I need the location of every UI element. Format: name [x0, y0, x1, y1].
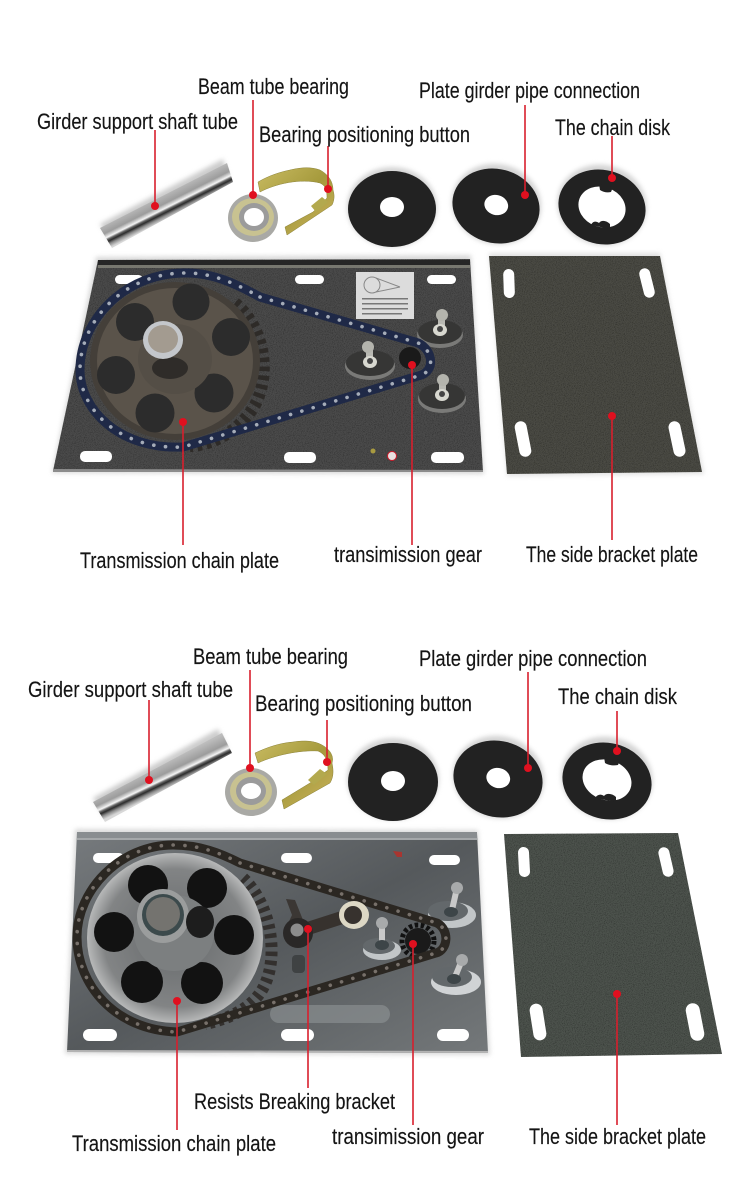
- section 1: side bracket plate: [489, 253, 704, 476]
- label: the chain disk: The chain disk: [555, 115, 671, 140]
- pointer: connection disc: [521, 105, 529, 199]
- pointer: shaft tube: [145, 700, 153, 784]
- bracket slots: [518, 846, 705, 1042]
- pointer: side bracket: [613, 990, 621, 1125]
- labels: section 2: [28, 644, 706, 1156]
- bearing: [228, 194, 278, 242]
- shaft tube: [100, 159, 233, 248]
- bolts on plate: [345, 309, 466, 460]
- label: resists breaking bracket: Resists Breaking bracket: [194, 1089, 395, 1114]
- label: transmission chain plate: Transmission chain plate: [80, 548, 279, 573]
- plate body: [65, 829, 490, 1055]
- mounting slots: [80, 275, 464, 463]
- bearing positioning clip: [258, 168, 334, 235]
- pointer: transmission gear: [408, 361, 416, 545]
- label: the chain disk: The chain disk: [558, 684, 678, 709]
- section 2: main plate: [65, 829, 490, 1055]
- bearing positioning clip: [255, 741, 333, 809]
- instruction label: [356, 272, 414, 319]
- washer disc: [347, 167, 437, 247]
- connection disc: [443, 154, 550, 254]
- braking bracket: [283, 899, 369, 948]
- label: girder support shaft tube: Girder support shaft tube: [37, 109, 238, 134]
- label: plate girder pipe connection: Plate girder pipe connection: [419, 646, 647, 671]
- pointer: chain plate: [179, 418, 187, 545]
- large sprocket: [90, 282, 264, 446]
- large sprocket: [87, 853, 272, 1024]
- pointer: chain plate: [173, 997, 181, 1130]
- washer disc: [347, 738, 439, 821]
- label: bearing positioning button: Bearing positioning button: [255, 691, 472, 716]
- pointer: clip: [324, 146, 332, 193]
- section 2: parts above plate: [93, 726, 662, 830]
- small sprocket: [402, 925, 434, 957]
- label: girder support shaft tube: Girder support shaft tube: [28, 677, 233, 702]
- pointer: clip: [323, 720, 331, 766]
- pointer: connection disc: [524, 672, 532, 772]
- shaft tube: [93, 729, 232, 822]
- pointer: braking bracket: [304, 925, 312, 1088]
- labels: section 1: [37, 74, 698, 573]
- label: bearing positioning button: Bearing positioning button: [259, 122, 470, 147]
- label: side bracket plate: The side bracket plate: [526, 542, 698, 567]
- section 2: side bracket plate: [504, 833, 722, 1057]
- label: beam tube bearing: Beam tube bearing: [198, 74, 349, 99]
- pointer: transmission gear: [409, 940, 417, 1125]
- pointer: side bracket: [608, 412, 616, 540]
- pointer: chain disk: [613, 711, 621, 755]
- label: transmission chain plate: Transmission chain plate: [72, 1131, 276, 1156]
- plate body: [52, 255, 484, 474]
- drive chain: [80, 273, 431, 447]
- label: transmission gear: transimission gear: [332, 1124, 484, 1149]
- drive chain: [77, 845, 446, 1032]
- mounting slots: [83, 853, 469, 1041]
- label: beam tube bearing: Beam tube bearing: [193, 644, 348, 669]
- bracket slots: [503, 267, 687, 458]
- pointer: bearing: [249, 100, 257, 199]
- section 1: parts above plate: [100, 154, 656, 255]
- chain disk: [552, 726, 662, 830]
- small sprocket: [399, 347, 421, 369]
- bolts on plate: [292, 851, 468, 984]
- leader lines: section 1: [151, 100, 616, 545]
- connection disc: [443, 726, 554, 829]
- label: side bracket plate: The side bracket plate: [529, 1124, 706, 1149]
- label: plate girder pipe connection: Plate girder pipe connection: [419, 78, 640, 103]
- leader lines: section 2: [145, 670, 621, 1130]
- pointer: chain disk: [608, 136, 616, 182]
- pointer: shaft tube: [151, 130, 159, 210]
- bearing: [225, 768, 277, 816]
- section 1: main plate: [52, 255, 484, 474]
- chain disk: [548, 155, 656, 255]
- pointer: bearing: [246, 670, 254, 772]
- label: transmission gear: transimission gear: [334, 542, 482, 567]
